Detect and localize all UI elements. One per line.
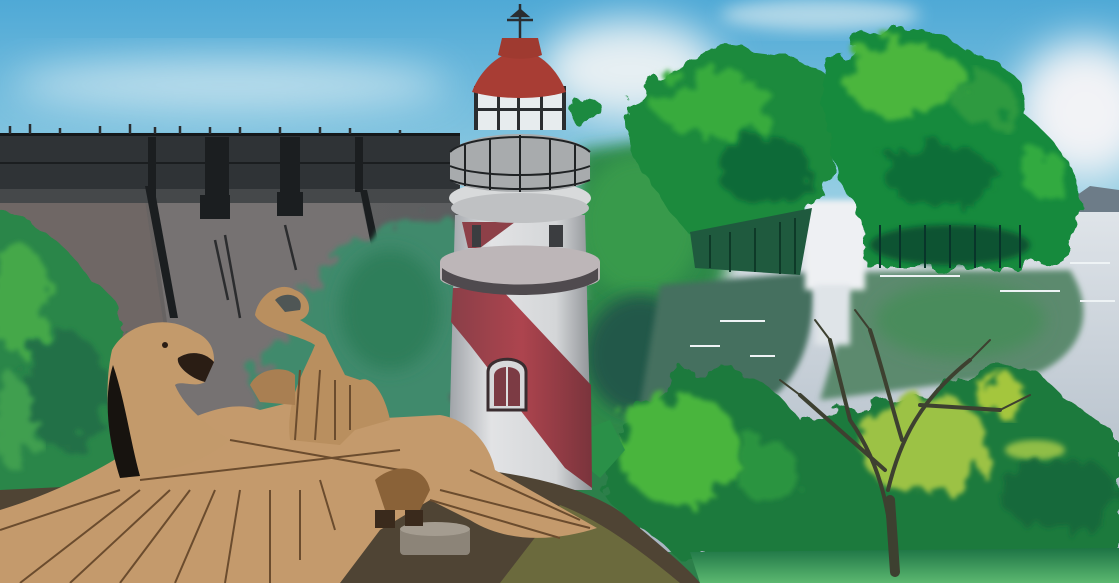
red dome	[472, 50, 566, 98]
windows	[549, 225, 563, 247]
tower body	[448, 215, 592, 490]
left tree	[628, 46, 840, 242]
left tree roots	[690, 208, 812, 275]
sky	[0, 0, 1119, 300]
weather vane	[507, 4, 533, 38]
gallery railing	[450, 134, 590, 192]
lighthouse	[440, 4, 600, 490]
rock ground	[0, 468, 700, 583]
water	[640, 212, 1119, 552]
water reflection	[640, 200, 1115, 405]
foreground bushes	[555, 368, 1119, 560]
claw tower	[255, 287, 390, 445]
body and wings	[0, 400, 597, 583]
right tree	[825, 30, 1082, 268]
dam wall	[0, 124, 460, 490]
eagle statue	[0, 287, 597, 583]
green fade behind lighthouse right	[566, 96, 740, 440]
middle ring	[440, 246, 600, 292]
red stripes	[451, 288, 592, 488]
head	[107, 322, 230, 478]
fern	[555, 420, 625, 478]
forest middle	[255, 220, 460, 440]
distant hills	[1070, 186, 1119, 214]
dome cap	[498, 38, 542, 59]
grass	[690, 548, 1119, 583]
mangrove trees	[628, 30, 1082, 275]
lantern room	[474, 86, 566, 130]
wing feathers	[0, 370, 590, 583]
dam top band	[0, 135, 460, 189]
upper ledge	[449, 180, 591, 216]
forest left	[0, 205, 128, 500]
bare tree	[780, 310, 1030, 572]
